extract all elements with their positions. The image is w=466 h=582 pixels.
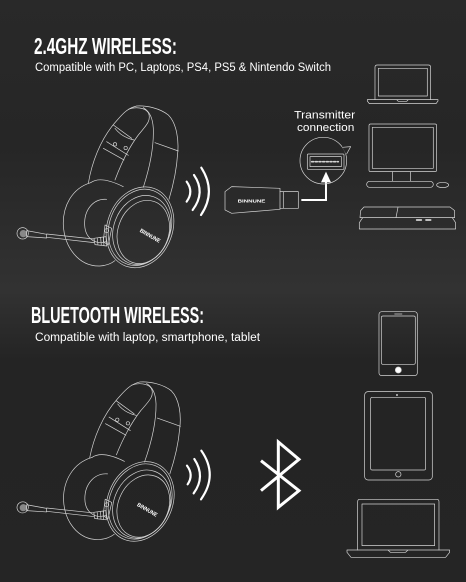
headset illustration (17, 106, 185, 277)
icon: tablet (365, 392, 432, 480)
subheading: bluetooth compatibility: Compatible with laptop, smartphone, tablet (35, 332, 261, 344)
heading: bluetooth wireless: BLUETOOTH WIRELESS: (31, 302, 204, 328)
panel: 2.4GHz wireless (17, 33, 456, 277)
label: transmitter connection (294, 110, 355, 134)
bluetooth symbol and devices (261, 312, 450, 557)
icon: wireless waves (187, 168, 209, 215)
arrow: to transmitter port (301, 172, 331, 200)
callout: usb port (300, 137, 351, 184)
icon: bluetooth (261, 442, 299, 507)
usb dongle: BINNUNE (238, 198, 265, 203)
heading: 2.4GHz wireless: 2.4GHZ WIRELESS: (34, 33, 177, 59)
label: transmitter connection: Transmitter (294, 110, 355, 122)
logo on earcup: BINNUNE (136, 502, 158, 519)
usb dongle (225, 187, 298, 213)
headset illustration (16, 382, 188, 551)
icon: laptop (347, 499, 450, 557)
panel: bluetooth wireless (16, 302, 450, 557)
label: transmitter connection: connection (297, 122, 354, 134)
icon: game console (359, 207, 456, 229)
usb transmitter and devices (225, 65, 456, 229)
icon: laptop (367, 65, 438, 104)
logo on earcup: BINNUNE (138, 228, 161, 245)
icon: desktop computer (367, 124, 449, 188)
icon: smartphone (379, 312, 417, 376)
icon: wireless waves (187, 451, 210, 499)
subheading: compatibility: Compatible with PC, Laptops, PS4, PS5 & Nintendo Switch (35, 62, 331, 74)
